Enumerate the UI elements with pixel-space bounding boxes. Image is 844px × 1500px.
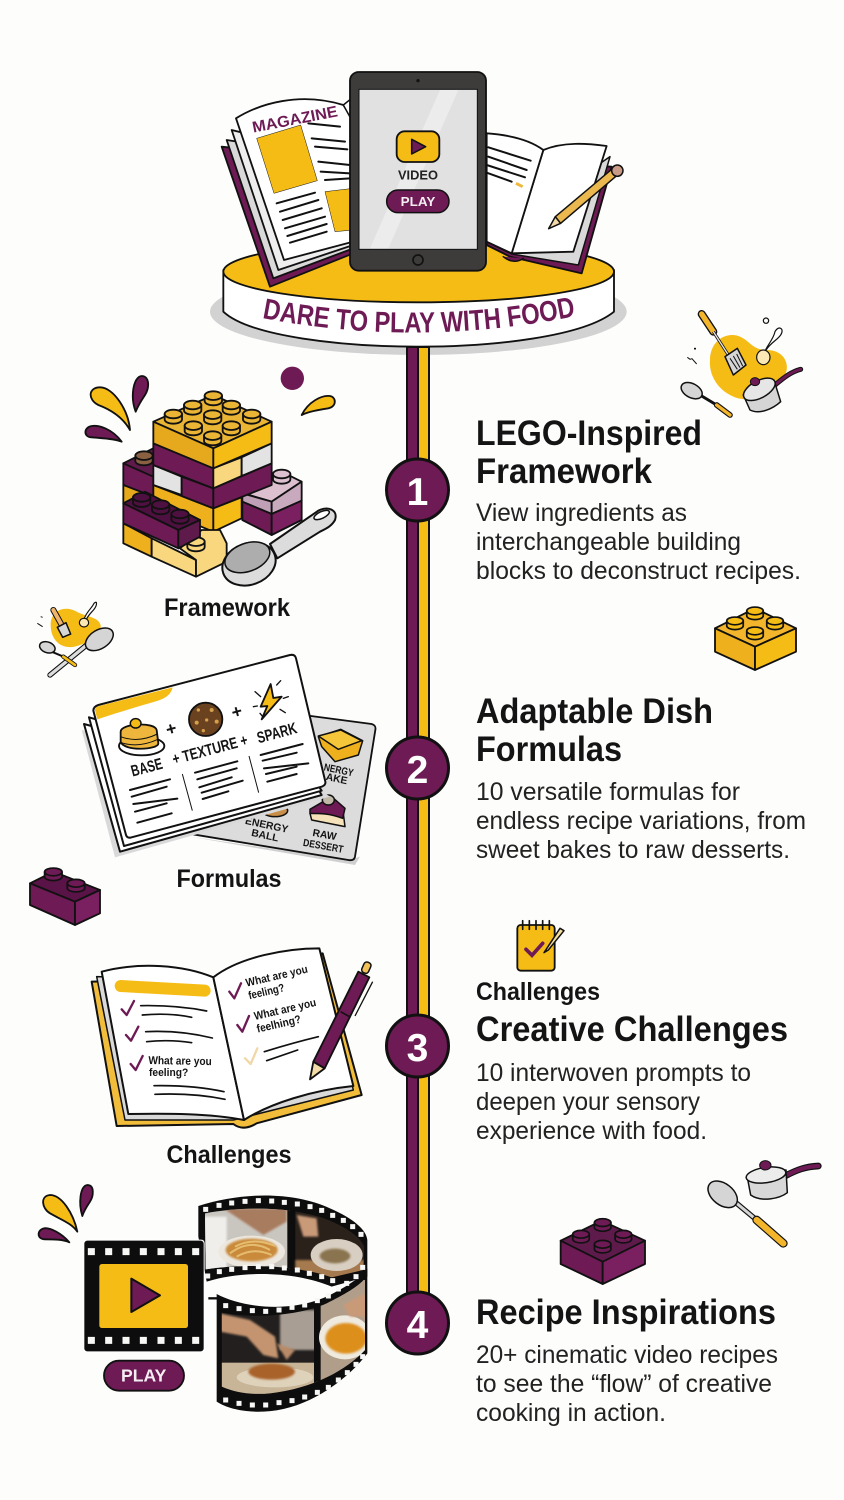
video icon (397, 131, 439, 162)
splash drops (85, 367, 335, 442)
step 1 markers and illustration: lego framework (85, 367, 336, 593)
step 1 text: interchangeable building (476, 528, 741, 556)
magazine book (222, 98, 353, 287)
prompts: feeling? (149, 1067, 188, 1079)
prompts: What are you (148, 1055, 212, 1068)
measuring spoon (216, 508, 336, 593)
notebook with pencil (487, 133, 623, 273)
challenges open book (92, 948, 373, 1128)
back card: NERGY (323, 762, 354, 779)
platform banner title (264, 298, 574, 332)
purple 2x2 lego brick (561, 1219, 645, 1284)
play pill: PLAY (121, 1366, 166, 1386)
formula column titles: BASE (129, 756, 165, 781)
step 3 text: deepen your sensory (476, 1088, 700, 1116)
video label: VIDEO (398, 168, 438, 182)
video recipes illustration (39, 1185, 371, 1412)
splash drops (39, 1185, 93, 1242)
timeline spine (407, 347, 429, 1305)
film perforations (206, 1201, 363, 1405)
prompts (148, 964, 317, 1079)
prompts: feelhing? (256, 1014, 302, 1036)
cookie icon (189, 703, 222, 736)
step number 2 (386, 737, 448, 799)
formulas illustration (82, 655, 376, 865)
formula text lines (130, 744, 308, 823)
step 2 text: Formulas (476, 730, 622, 769)
platform shadow (210, 268, 627, 355)
magazine label: MAGAZINE (251, 103, 339, 137)
tablet (350, 72, 486, 271)
prompts: feeling? (247, 982, 286, 1002)
step 4 text: 20+ cinematic video recipes (476, 1341, 778, 1369)
play pill (104, 1361, 184, 1391)
plus signs: + (229, 701, 244, 723)
step 2 text: Adaptable Dish (476, 692, 713, 731)
play button (387, 190, 449, 213)
spark icon (253, 681, 288, 719)
pencil (549, 165, 623, 229)
writing lines (141, 1006, 318, 1099)
back card: AKE (325, 772, 348, 787)
plus signs (163, 701, 244, 740)
step 4 text: cooking in action. (476, 1399, 666, 1427)
doodle: tools left (37, 602, 117, 675)
step number 3: 3 (407, 1027, 428, 1070)
step 3 text: experience with food. (476, 1117, 707, 1145)
doodle: kitchen tools top right (678, 314, 801, 415)
notepad icon (517, 921, 564, 971)
step 3 text: Creative Challenges (476, 1010, 788, 1049)
formula column titles: SPARK (255, 720, 299, 747)
step 3 text: Challenges (476, 978, 600, 1006)
doodle: pot and spoon (703, 1161, 818, 1243)
back card: RAW (312, 828, 337, 843)
prompts: What are you (245, 964, 309, 990)
label: challenges: Challenges (166, 1141, 292, 1169)
hero illustration: books, tablet and platform (210, 72, 627, 355)
label: formulas: Formulas (176, 865, 282, 893)
step number 4: 4 (407, 1304, 429, 1347)
step 2 text: endless recipe variations, from (476, 807, 806, 835)
step 4 text (476, 1293, 778, 1427)
step number 4 (386, 1292, 448, 1354)
step 1 text: blocks to deconstruct recipes. (476, 557, 801, 585)
step 2 text (476, 692, 806, 864)
step 2 text: 10 versatile formulas for (476, 778, 740, 806)
pancake icon (119, 719, 164, 755)
platform (223, 241, 614, 347)
step 1 text: LEGO-Inspired (476, 414, 702, 453)
back card: BALL (250, 828, 279, 844)
step 2 text: sweet bakes to raw desserts. (476, 836, 790, 864)
step 1 text: Framework (476, 452, 652, 491)
step number 1 (386, 459, 448, 521)
step 3 text: 10 interwoven prompts to (476, 1059, 751, 1087)
purple lego brick (30, 868, 100, 925)
yellow lego brick (715, 607, 796, 670)
step number 1: 1 (407, 471, 428, 514)
back card (187, 715, 376, 865)
step 1 text: View ingredients as (476, 499, 687, 527)
label: framework: Framework (164, 594, 290, 622)
step 1 text (476, 414, 801, 585)
film play frame (83, 1240, 205, 1352)
step 4 text: to see the “flow” of creative (476, 1370, 772, 1398)
prompts: What are you (253, 997, 317, 1023)
platform banner title: DARE TO PLAY WITH FOOD (264, 298, 574, 332)
step number 3 (386, 1015, 448, 1077)
lego stack (123, 391, 302, 577)
step 3 text (476, 978, 788, 1145)
step 4 text: Recipe Inspirations (476, 1293, 776, 1332)
play button: PLAY (401, 195, 436, 209)
pen (310, 961, 373, 1079)
step number 2: 2 (407, 749, 428, 792)
back card: ENERGY (244, 816, 289, 836)
curled film reel with food photos (198, 1196, 371, 1412)
formula column titles: + TEXTURE + (171, 732, 250, 769)
back card: DESSERT (302, 838, 345, 856)
front cards stack (82, 655, 330, 857)
formula column titles (129, 720, 299, 781)
plus signs: + (163, 718, 179, 740)
checkmarks (122, 983, 249, 1070)
